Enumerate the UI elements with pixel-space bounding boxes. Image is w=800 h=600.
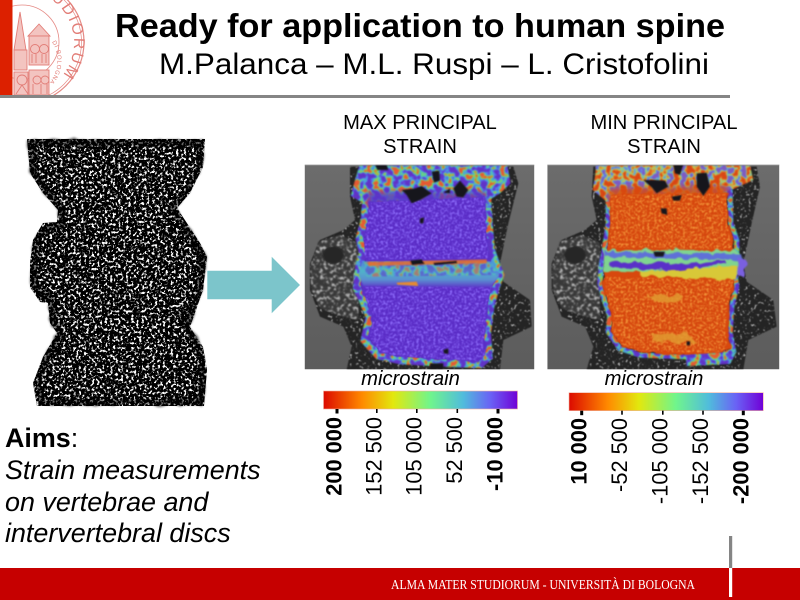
- purple speckle texture: [364, 197, 488, 259]
- tick labels: -200 000: [728, 418, 754, 504]
- strain field: vertebral bodies: [603, 193, 734, 354]
- panel: max principal strain map: [305, 165, 534, 369]
- heading: max principal strain: [343, 112, 497, 158]
- speckle pattern image: [27, 139, 207, 406]
- strain field: blotchy edge ring: [600, 192, 737, 357]
- top border: [547, 164, 780, 166]
- footer divider: [729, 536, 732, 568]
- tick labels: 105 000: [402, 417, 426, 496]
- title: Ready for application to human spine: [115, 7, 725, 44]
- disc colour bands: [602, 250, 747, 343]
- red logo bar: [0, 0, 12, 95]
- tick labels: -105 000: [648, 418, 672, 504]
- text block: aims: Strain measurements: [5, 455, 261, 485]
- heading: max principal strain: MAX PRINCIPAL: [343, 112, 497, 134]
- bright left osteophyte: [310, 235, 358, 320]
- panel: min principal strain map: [547, 165, 779, 369]
- tick labels: [566, 418, 754, 504]
- osteophyte dark hollow: [564, 246, 586, 264]
- header rule: [0, 95, 730, 98]
- tick labels: -52 500: [607, 418, 632, 492]
- fade from end plate to body: [608, 185, 727, 202]
- tick labels: 152 500: [362, 417, 386, 496]
- arrow: [207, 257, 300, 313]
- strain field: blotchy edge ring: [357, 195, 500, 364]
- disc upper line of red and black spots: [368, 259, 487, 286]
- strain field: vertebral bodies: [361, 197, 497, 361]
- seal emblem: [12, 0, 85, 95]
- black voids in top end plate: [375, 165, 468, 369]
- text block: aims: on vertebrae and: [5, 487, 209, 517]
- grey background: [305, 165, 534, 369]
- tick labels: -152 500: [688, 418, 713, 504]
- footer band: [0, 536, 800, 600]
- black voids: [643, 165, 710, 345]
- strain field: top end plate: [351, 165, 511, 205]
- authors: M.Palanca – M.L. Ruspi – L. Cristofolini: [159, 48, 709, 81]
- fade from end plate to body: [367, 192, 487, 207]
- disc blotches: [363, 262, 498, 277]
- colour bar legend: min principal strain: [566, 368, 763, 504]
- seal lettering: DI BOLOGNA: [50, 40, 62, 84]
- bone and specimen surroundings: [552, 167, 777, 369]
- text block: aims: [5, 423, 261, 548]
- text block: aims: intervertebral discs: [5, 518, 231, 548]
- footer text: ALMA MATER STUDIORUM - UNIVERSITÀ DI BOLOGNA: [391, 577, 695, 592]
- tick marks: [580, 411, 745, 415]
- tick labels: 52 500: [442, 417, 467, 484]
- grey background: [547, 165, 779, 369]
- top border: [304, 164, 534, 166]
- logo: University of Bologna seal: [0, 0, 85, 95]
- heading: min principal strain: STRAIN: [627, 136, 701, 158]
- bottom colour patch: [685, 352, 737, 366]
- bone and specimen surroundings: [310, 167, 532, 369]
- tick labels: 10 000: [566, 418, 592, 485]
- orange speckle texture: [608, 193, 732, 249]
- heading: max principal strain: STRAIN: [383, 136, 457, 158]
- heading: min principal strain: MIN PRINCIPAL: [590, 112, 738, 134]
- legend unit: microstrain: [605, 368, 703, 390]
- legend unit: microstrain: [361, 368, 460, 390]
- tick labels: [322, 417, 508, 496]
- gradient bar: [324, 391, 518, 409]
- osteophyte dark hollow: [323, 246, 344, 264]
- text block: aims: Aims:: [5, 423, 78, 453]
- tick marks: [336, 409, 500, 414]
- strain field: intervertebral disc: [359, 262, 499, 287]
- tick labels: -10 000: [482, 417, 508, 491]
- colour bar legend: max principal strain: [322, 368, 518, 496]
- tick labels: 200 000: [322, 417, 346, 496]
- bright left osteophyte: [552, 235, 600, 320]
- strain field: top end plate: [593, 165, 753, 202]
- heading: min principal strain: [590, 112, 738, 158]
- gradient bar: [569, 393, 763, 411]
